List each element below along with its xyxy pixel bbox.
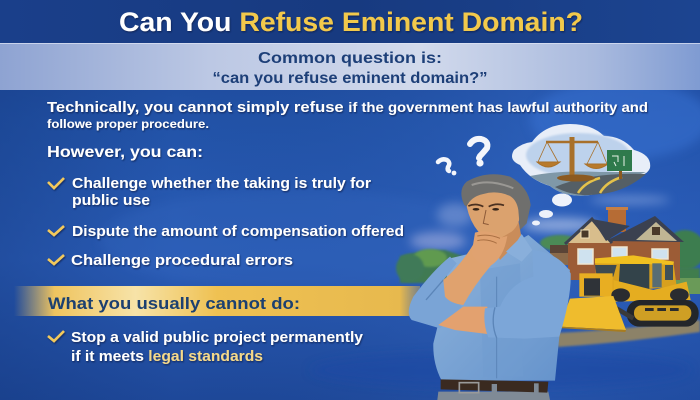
list: what you cannot do: if it meets legal standards [71, 349, 263, 365]
belt [441, 379, 548, 395]
icon: check 3 [48, 255, 64, 264]
hair [461, 174, 531, 230]
bulldozer [559, 255, 699, 332]
trousers [437, 392, 550, 400]
face details [468, 204, 504, 207]
house [550, 207, 684, 280]
title: Can You Refuse Eminent Domain? [119, 7, 583, 37]
cab [595, 257, 677, 292]
hand on chin [472, 231, 507, 265]
list: what you can do [48, 176, 404, 269]
left sleeve [409, 257, 462, 328]
intro text [47, 99, 648, 131]
thought bubbles [552, 194, 572, 206]
icon: check 2 [48, 226, 64, 235]
house windows [578, 247, 668, 264]
gold banner [14, 286, 420, 316]
body [613, 280, 691, 302]
list: what you can do: public use [72, 193, 150, 209]
icon: check 1 [48, 178, 64, 188]
distant clouds [410, 196, 670, 250]
man [409, 174, 571, 400]
landscape: trees and ground [396, 230, 700, 347]
question text line 2: “can you refuse eminent domain?” [212, 70, 488, 87]
neck [490, 220, 522, 260]
icon: check 4 [48, 331, 64, 341]
intro text: followe proper procedure. [47, 117, 209, 131]
blade [559, 296, 626, 330]
icon: road sign [607, 150, 632, 171]
collar [506, 234, 532, 262]
question text line 1: Common question is: [258, 50, 442, 67]
list: what you cannot do [48, 330, 363, 365]
gold banner: What you usually cannot do: [48, 294, 300, 313]
crossing forearm [438, 307, 487, 334]
intro text: Technically, you cannot simply refuse if the government has lawful authority and [47, 99, 648, 116]
list: what you cannot do: Stop a valid public project permanently [71, 330, 363, 346]
dirt ground [556, 320, 700, 347]
icon: question marks [438, 139, 487, 175]
list: what you can do: Challenge procedural errors [71, 253, 293, 269]
left forearm [443, 242, 498, 305]
question band [0, 43, 700, 90]
head [467, 185, 520, 238]
list: what you can do: Dispute the amount of compensation offered [72, 224, 404, 240]
list: what you can do: Challenge whether the taking is truly for [72, 176, 371, 192]
thought cloud [512, 124, 650, 226]
tracks [627, 300, 699, 327]
heading: however you can: However, you can: [47, 144, 203, 161]
right sleeve [484, 250, 571, 339]
icon: scales of justice [537, 137, 608, 182]
torso shirt [433, 235, 570, 381]
